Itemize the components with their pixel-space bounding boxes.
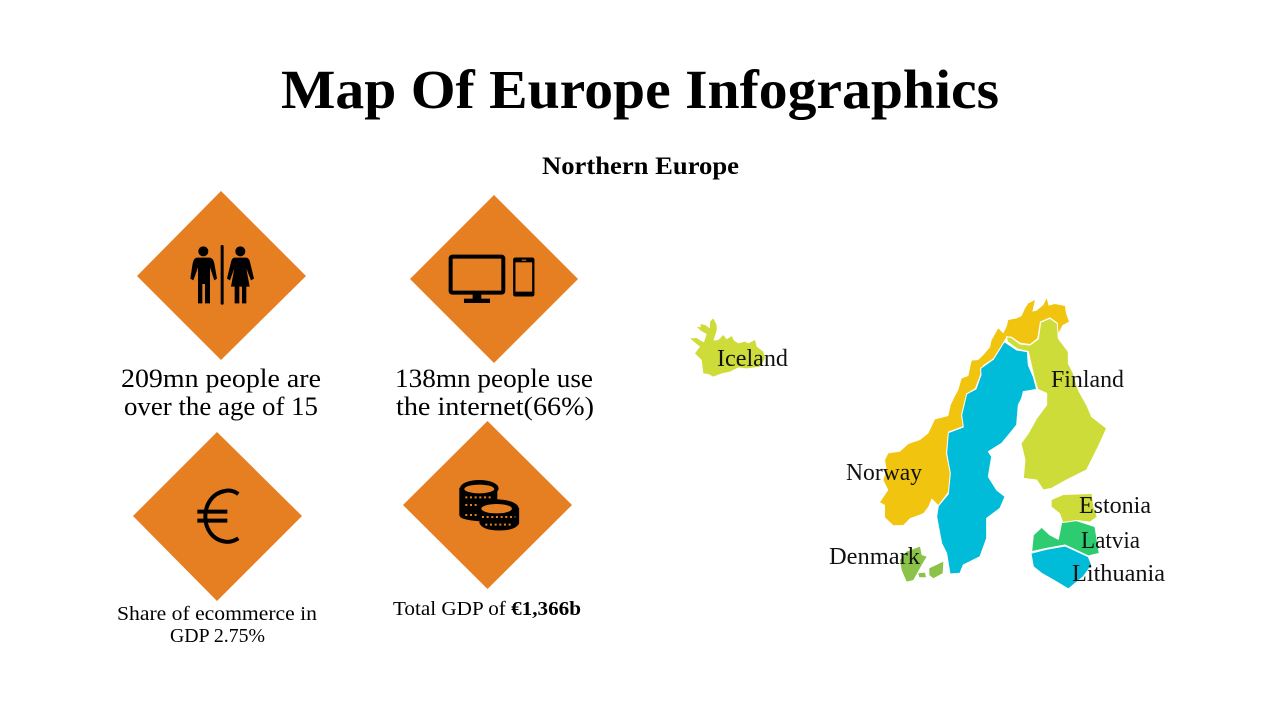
- label: Norway: Norway: [846, 460, 922, 486]
- panel: internet users: [395, 195, 594, 421]
- icon: euro: [197, 491, 238, 542]
- diamond: GDP: [403, 421, 572, 589]
- subtitle: Northern Europe: [542, 153, 739, 180]
- label: Iceland: Iceland: [717, 346, 788, 372]
- label: Estonia: Estonia: [1079, 493, 1151, 519]
- text: ecommerce share: Share of ecommerce in: [117, 603, 317, 625]
- icon: man and woman: [190, 245, 254, 305]
- region: Norway: [880, 298, 1069, 525]
- diamond: population: [137, 191, 306, 360]
- icon: coins: [460, 480, 519, 530]
- text: people over 15: [121, 363, 321, 421]
- panel: total GDP: [393, 421, 581, 620]
- region: Denmark: [900, 547, 943, 582]
- text: ecommerce share: GDP 2.75%: [170, 625, 265, 647]
- text: total GDP: Total GDP of €1,366b: [393, 598, 581, 620]
- text: people over 15: over the age of 15: [124, 391, 318, 421]
- region: Estonia: [1052, 494, 1097, 523]
- text: people over 15: 209mn people are: [121, 363, 321, 393]
- diamond: internet: [410, 195, 578, 363]
- text: internet users: 138mn people use: [395, 363, 593, 393]
- label: Finland: Finland: [1051, 367, 1124, 393]
- text: internet users: [395, 363, 594, 421]
- panel: ecommerce share: [117, 432, 317, 647]
- label: Lithuania: Lithuania: [1072, 561, 1165, 587]
- diamond: ecommerce: [133, 432, 302, 601]
- region: Latvia: [1032, 521, 1099, 556]
- region: Finland: [1007, 318, 1107, 490]
- region: Iceland: [690, 318, 765, 377]
- title: Map Of Europe Infographics: [281, 59, 999, 120]
- region: Sweden: [937, 342, 1037, 574]
- region: Lithuania: [1031, 546, 1092, 589]
- text: internet users: the internet(66%): [396, 391, 594, 421]
- label: Denmark: Denmark: [829, 544, 920, 570]
- text: ecommerce share: [117, 603, 317, 647]
- label: Latvia: Latvia: [1081, 528, 1140, 554]
- icon: monitor and phone: [451, 257, 533, 303]
- panel: population over 15: [121, 191, 321, 421]
- map: northern Europe: [690, 298, 1165, 589]
